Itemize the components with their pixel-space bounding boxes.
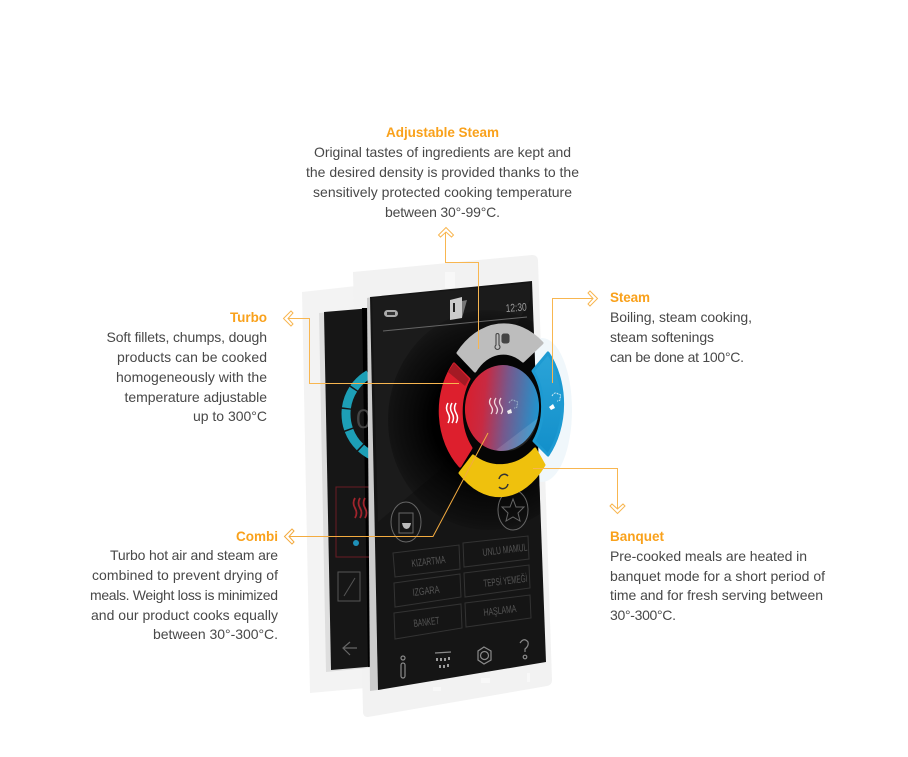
bottom toolbar icons — [401, 640, 528, 678]
button labels: TEPSİ YEMEĞİ — [483, 572, 528, 590]
button labels: HAŞLAMA — [483, 603, 517, 619]
icon: shower — [435, 652, 451, 668]
callout: combi — [90, 529, 278, 642]
callout: turbo: temperature adjustable — [124, 389, 267, 405]
callout: turbo: Soft fillets, chumps, dough — [106, 329, 267, 345]
callout: turbo: Turbo — [230, 310, 267, 325]
callout: turbo: up to 300°C — [193, 408, 267, 424]
callout: banquet: Pre-cooked meals are heated in — [610, 548, 807, 564]
callout: steam: can be done at 100°C. — [610, 349, 744, 365]
callout: combi: meals. Weight loss is minimized — [90, 587, 278, 603]
callout: turbo: homogeneously with the — [116, 369, 267, 385]
edit icon — [338, 572, 360, 601]
callout: banquet — [610, 529, 825, 623]
callout: adjustable steam: Original tastes of ingredients are kept and — [314, 144, 571, 160]
ring value: 02 — [356, 404, 386, 434]
icon: help — [520, 640, 528, 659]
callout: banquet: banquet mode for a short period of — [610, 568, 825, 584]
leader and arrow: steam — [552, 291, 598, 383]
button labels: IZGARA — [412, 584, 440, 599]
icon: info — [401, 656, 405, 678]
callout: banquet: Banquet — [610, 529, 664, 544]
back arrow — [343, 642, 357, 655]
callout: combi: combined to prevent drying of — [92, 567, 278, 583]
icon: door — [450, 297, 467, 320]
callout: adjustable steam: Adjustable Steam — [386, 125, 499, 140]
dark shadow around the dial — [389, 319, 540, 514]
callout: combi: Turbo hot air and steam are — [110, 547, 278, 563]
segment: banquet (yellow) — [460, 449, 544, 496]
leader and arrow: banquet — [533, 468, 625, 514]
icon: settings gear — [478, 647, 491, 664]
icon: circular arrows — [499, 474, 508, 489]
segment: adjustable steam (grey) — [458, 325, 542, 371]
callout: adjustable steam: the desired density is provided thanks to the — [306, 164, 579, 180]
segment: steam (blue) — [533, 353, 563, 455]
callout: adjustable steam: sensitively protected cooking temperature — [313, 184, 572, 200]
leader and arrow: combi — [284, 433, 488, 544]
dial black base — [456, 351, 548, 467]
cyan progress ring — [342, 370, 368, 458]
callout: turbo: products can be cooked — [117, 349, 267, 365]
icon: cloud badge — [384, 310, 398, 317]
callout: steam — [610, 290, 752, 365]
callout: steam: Boiling, steam cooking, — [610, 309, 752, 325]
callout: turbo — [106, 310, 267, 424]
glow behind blue segment — [512, 338, 572, 482]
icon: thermometer and steam — [495, 334, 509, 350]
callout: combi: Combi — [236, 529, 278, 544]
status bar — [383, 297, 527, 331]
dial centre: combi — [461, 362, 543, 454]
leader and arrow: turbo — [284, 311, 459, 384]
callout: banquet: 30°-300°C. — [610, 607, 676, 623]
segment: turbo (red) — [440, 363, 471, 466]
ghost reflections of the icons — [433, 272, 530, 691]
callout: banquet: time and for fresh serving between — [610, 587, 823, 603]
button labels: KIZARTMA — [411, 554, 446, 570]
program button grid — [393, 536, 531, 639]
callout: steam: Steam — [610, 290, 650, 305]
callout: combi: and our product cooks equally — [91, 607, 278, 623]
callout: adjustable steam: between 30°-99°C. — [385, 204, 500, 220]
panel: rear display — [319, 308, 378, 672]
panel: ghost backdrop of rear display — [302, 286, 366, 693]
button labels — [411, 542, 528, 630]
program circle: bowl — [391, 502, 421, 542]
program circle: star — [498, 490, 528, 530]
panel: front display — [367, 281, 546, 691]
leader and arrow: adjustable steam — [438, 228, 478, 349]
button labels: UNLU MAMUL — [482, 542, 528, 559]
button labels: BANKET — [413, 615, 441, 630]
combi mode icon — [336, 486, 369, 558]
callout: steam: steam softenings — [610, 329, 714, 345]
dial control — [440, 325, 563, 496]
callout: adjustable steam — [306, 125, 579, 220]
callout: combi: between 30°-300°C. — [153, 626, 278, 642]
clock: 12:30 — [505, 302, 527, 315]
panel: ghost backdrop of front display — [353, 255, 552, 717]
